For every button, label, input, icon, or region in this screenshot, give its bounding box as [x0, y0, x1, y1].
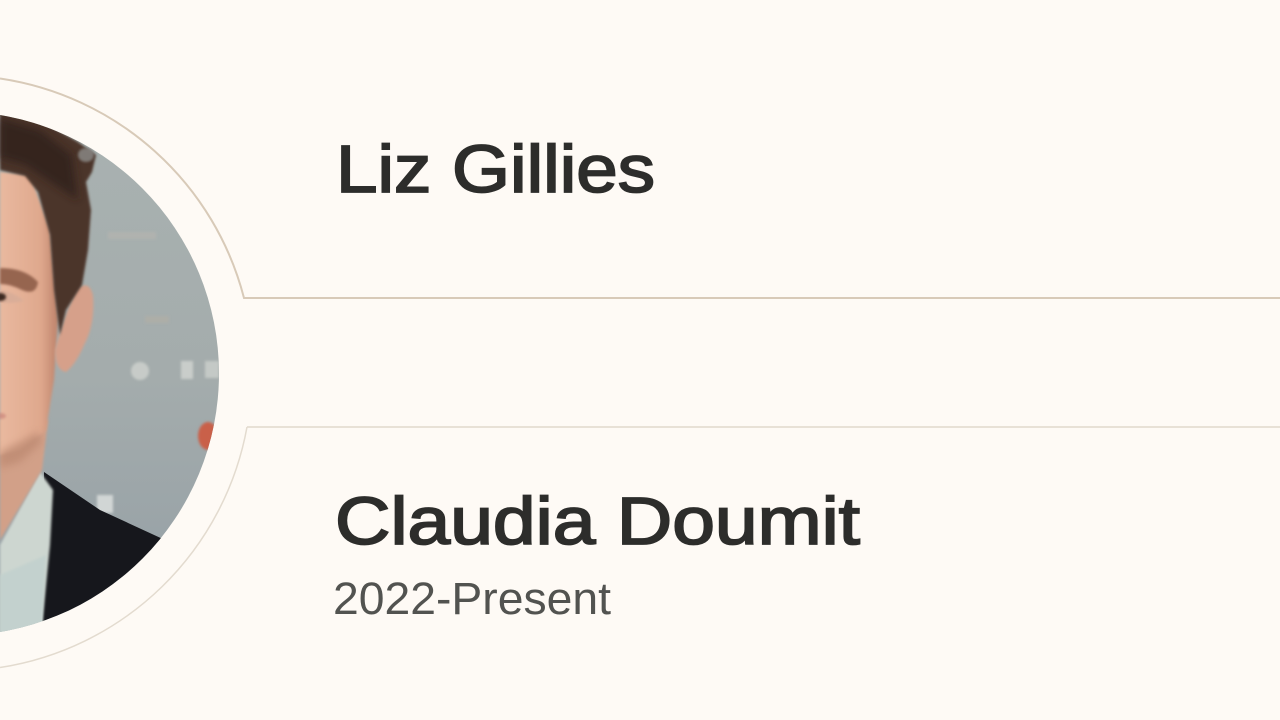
grey hair detail [78, 148, 94, 162]
red spot [198, 422, 218, 450]
lips [0, 413, 6, 419]
eyebrow [0, 268, 38, 292]
name: Claudia Doumit: Claudia Doumit [335, 484, 860, 559]
ear [55, 285, 93, 372]
face [0, 172, 58, 455]
hair [0, 112, 96, 335]
eye [2, 290, 20, 302]
chin shadow [0, 432, 42, 468]
backdrop logos [97, 232, 219, 513]
photo backdrop [0, 115, 219, 632]
name: Liz Gillies: Liz Gillies [336, 132, 655, 207]
dates: 2022-Present: 2022-Present [333, 573, 611, 624]
neck [0, 420, 48, 540]
jacket [42, 472, 165, 625]
shirt [0, 472, 53, 640]
portrait photo [0, 115, 219, 632]
